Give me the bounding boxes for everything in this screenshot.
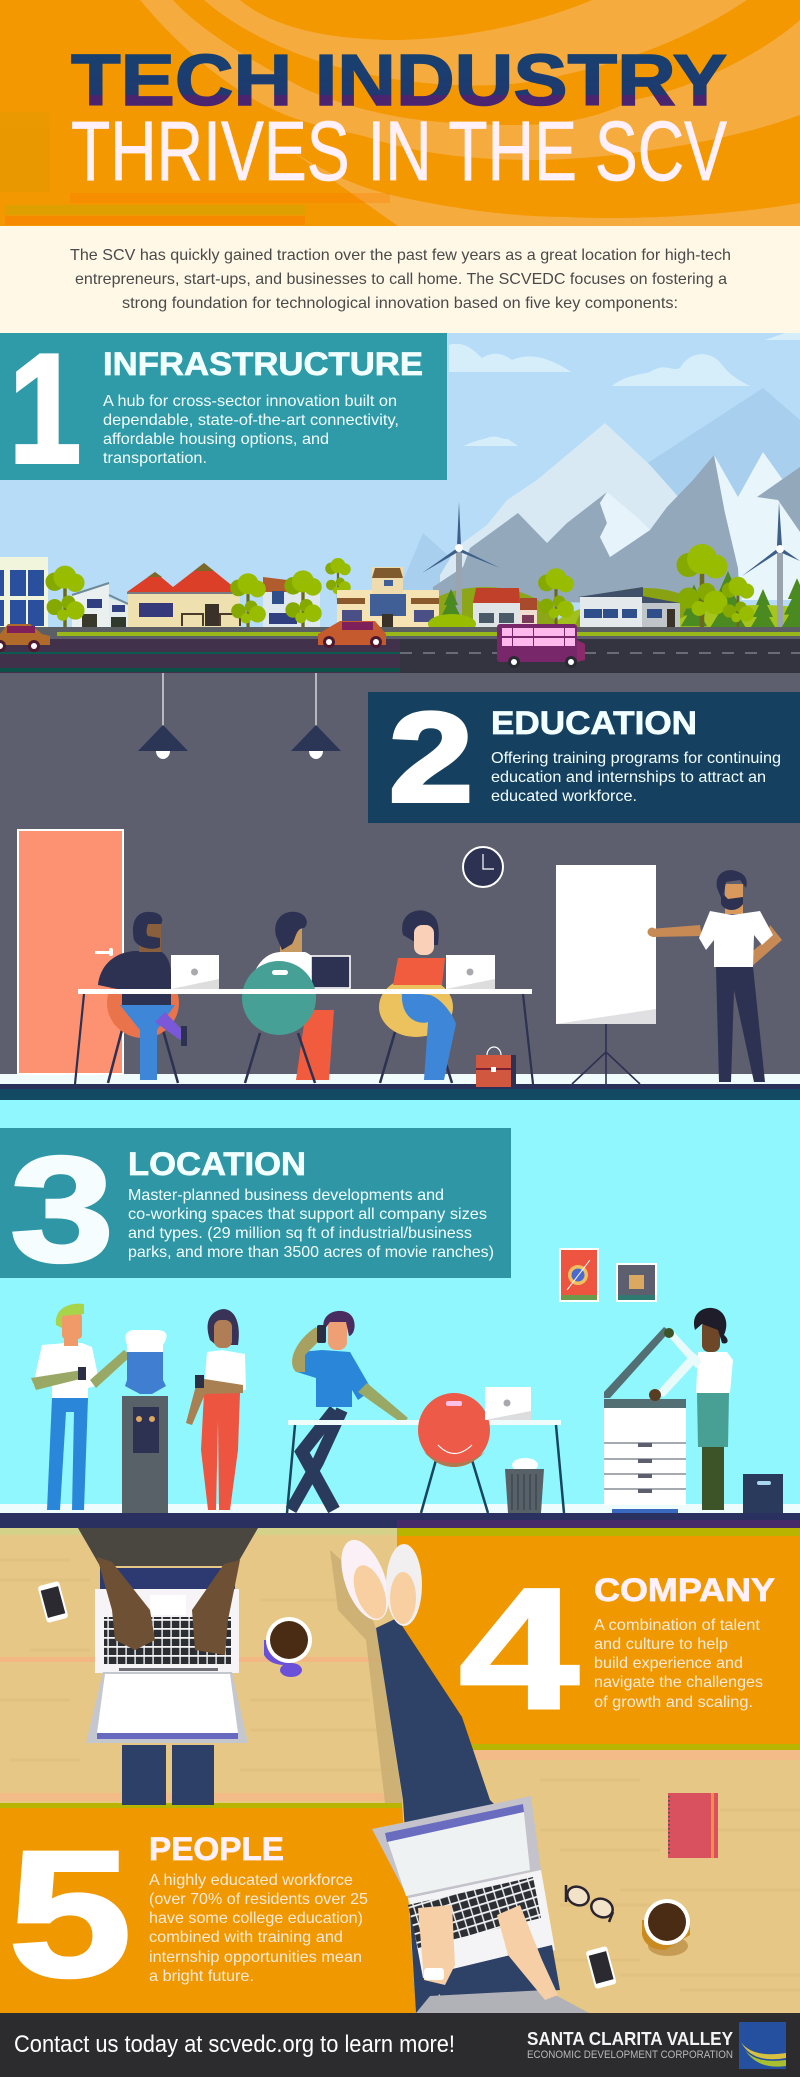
body text: dependable, state-of-the-art connectivity, <box>103 412 399 429</box>
poster 2 <box>616 1263 657 1302</box>
clouds <box>449 333 800 446</box>
intro panel: The SCV has quickly gained traction over the past few years as a great location for high-tech <box>70 247 731 264</box>
heading: PEOPLE <box>149 1831 284 1867</box>
gray house <box>578 587 680 627</box>
wood grain <box>0 1560 800 1990</box>
body text: A hub for cross-sector innovation built on <box>103 393 397 410</box>
intro panel <box>0 226 800 333</box>
office building <box>0 557 48 627</box>
water cooler <box>122 1330 168 1513</box>
phone <box>37 1581 69 1623</box>
gray mountain <box>433 455 738 605</box>
number 1: 1 <box>9 322 81 495</box>
body text: have some college education) <box>149 1910 363 1927</box>
person: woman with cup <box>186 1309 246 1510</box>
panel: people background <box>0 1803 416 2013</box>
organization name: SANTA CLARITA VALLEY <box>527 2029 733 2049</box>
person 1 <box>98 912 187 1080</box>
coffee mug 2 <box>642 1899 690 1956</box>
presenter <box>648 870 782 1082</box>
panel: location <box>0 1125 511 1293</box>
organization name: ECONOMIC DEVELOPMENT CORPORATION <box>527 2049 733 2061</box>
person: woman at copier <box>649 1308 733 1510</box>
person: man with cup <box>31 1304 131 1510</box>
body text: (over 70% of residents over 25 <box>149 1891 368 1908</box>
number 4: 4 <box>459 1553 579 1745</box>
laptop <box>86 1589 248 1743</box>
shoes <box>332 1534 422 1626</box>
title <box>71 41 727 198</box>
tree row <box>45 558 351 632</box>
body text: parks, and more than 3500 acres of movie ranches) <box>128 1244 494 1261</box>
red roof house <box>473 588 537 627</box>
logo <box>739 2022 786 2069</box>
town house <box>337 567 439 627</box>
far mountains <box>395 388 800 600</box>
road <box>0 627 800 673</box>
panel: education <box>368 686 800 828</box>
seated person 3 chair <box>379 977 453 1083</box>
trash bin <box>505 1458 544 1513</box>
number 2: 2 <box>389 686 473 828</box>
body text <box>103 393 399 467</box>
copier <box>604 1327 686 1513</box>
body text: educated workforce. <box>491 788 637 805</box>
file box <box>743 1474 783 1513</box>
heading: INFRASTRUCTURE <box>103 346 423 382</box>
text: people <box>8 1814 368 2015</box>
body text: and types. (29 million sq ft of industrial/business <box>128 1225 472 1242</box>
body text <box>149 1872 368 1985</box>
body text: co-working spaces that support all company sizes <box>128 1206 487 1223</box>
body text: transportation. <box>103 450 207 467</box>
body text: affordable housing options, and <box>103 431 329 448</box>
laptop <box>485 1387 531 1420</box>
body text <box>128 1187 494 1261</box>
notebook <box>668 1793 718 1858</box>
header background <box>0 0 800 226</box>
white house <box>72 583 128 627</box>
whiteboard <box>556 865 656 1084</box>
intro panel: strong foundation for technological innovation based on five key components: <box>122 295 678 312</box>
top-down person at laptop <box>78 1528 258 1805</box>
body text: education and internships to attract an <box>491 769 766 786</box>
bus <box>497 624 585 668</box>
door <box>18 830 123 1074</box>
body text: a bright future. <box>149 1968 254 1985</box>
heading: COMPANY <box>594 1572 775 1608</box>
number 5: 5 <box>8 1814 132 2015</box>
footer <box>0 2013 800 2077</box>
body text: Offering training programs for continuing <box>491 750 781 767</box>
call to action: Contact us today at scvedc.org to learn more! <box>14 2031 455 2058</box>
section 4 and 5 desk <box>0 1528 800 2013</box>
body text: navigate the challenges <box>594 1674 763 1691</box>
glasses <box>564 1883 616 1922</box>
body text: Master-planned business developments and <box>128 1187 444 1204</box>
text: company <box>459 1553 775 1745</box>
hands <box>97 1557 240 1655</box>
number 3: 3 <box>10 1125 114 1293</box>
section 2 classroom <box>0 673 800 1100</box>
person 2 and seat back <box>242 912 350 1083</box>
bag <box>476 1047 516 1087</box>
section 1 landscape <box>0 333 800 680</box>
main house <box>127 563 240 627</box>
section 3 office <box>0 1100 800 1528</box>
body text <box>594 1617 763 1711</box>
phone 2 <box>585 1946 617 1989</box>
trees and pines <box>428 544 800 634</box>
table <box>75 989 533 1084</box>
title: TECH INDUSTRY <box>71 41 727 121</box>
seated woman torso <box>416 1905 589 2013</box>
poster 1 <box>559 1248 599 1302</box>
person: man on phone <box>291 1311 408 1510</box>
hills <box>415 587 800 680</box>
body text: build experience and <box>594 1655 743 1672</box>
pendant lamps <box>138 673 341 759</box>
blue house <box>263 577 320 627</box>
top-down laptop 2 <box>372 1796 555 1978</box>
snow mountain <box>440 423 700 600</box>
laptops <box>171 955 495 989</box>
body text: combined with training and <box>149 1929 343 1946</box>
wind turbines <box>422 502 800 628</box>
panel: company background <box>397 1528 800 1750</box>
body text: A highly educated workforce <box>149 1872 353 1889</box>
heading: EDUCATION <box>491 705 697 741</box>
organization name <box>527 2029 733 2061</box>
table and red chair <box>287 1393 564 1513</box>
body text: A combination of talent <box>594 1617 761 1634</box>
coffee mug <box>264 1617 312 1677</box>
body text: and culture to help <box>594 1636 728 1653</box>
cars <box>0 621 386 652</box>
body text <box>491 750 781 805</box>
legs of seated woman <box>330 1550 530 2013</box>
intro panel: entrepreneurs, start-ups, and businesses to call home. The SCVEDC focuses on fostering a <box>75 271 727 288</box>
body text: internship opportunities mean <box>149 1949 362 1966</box>
body text: of growth and scaling. <box>594 1694 753 1711</box>
seated person 1 chair <box>107 968 179 1083</box>
snow peaks <box>600 452 800 600</box>
wall clock <box>463 847 503 887</box>
panel: infrastructure <box>0 322 447 495</box>
person 3 <box>393 910 456 1080</box>
heading: LOCATION <box>128 1146 306 1182</box>
